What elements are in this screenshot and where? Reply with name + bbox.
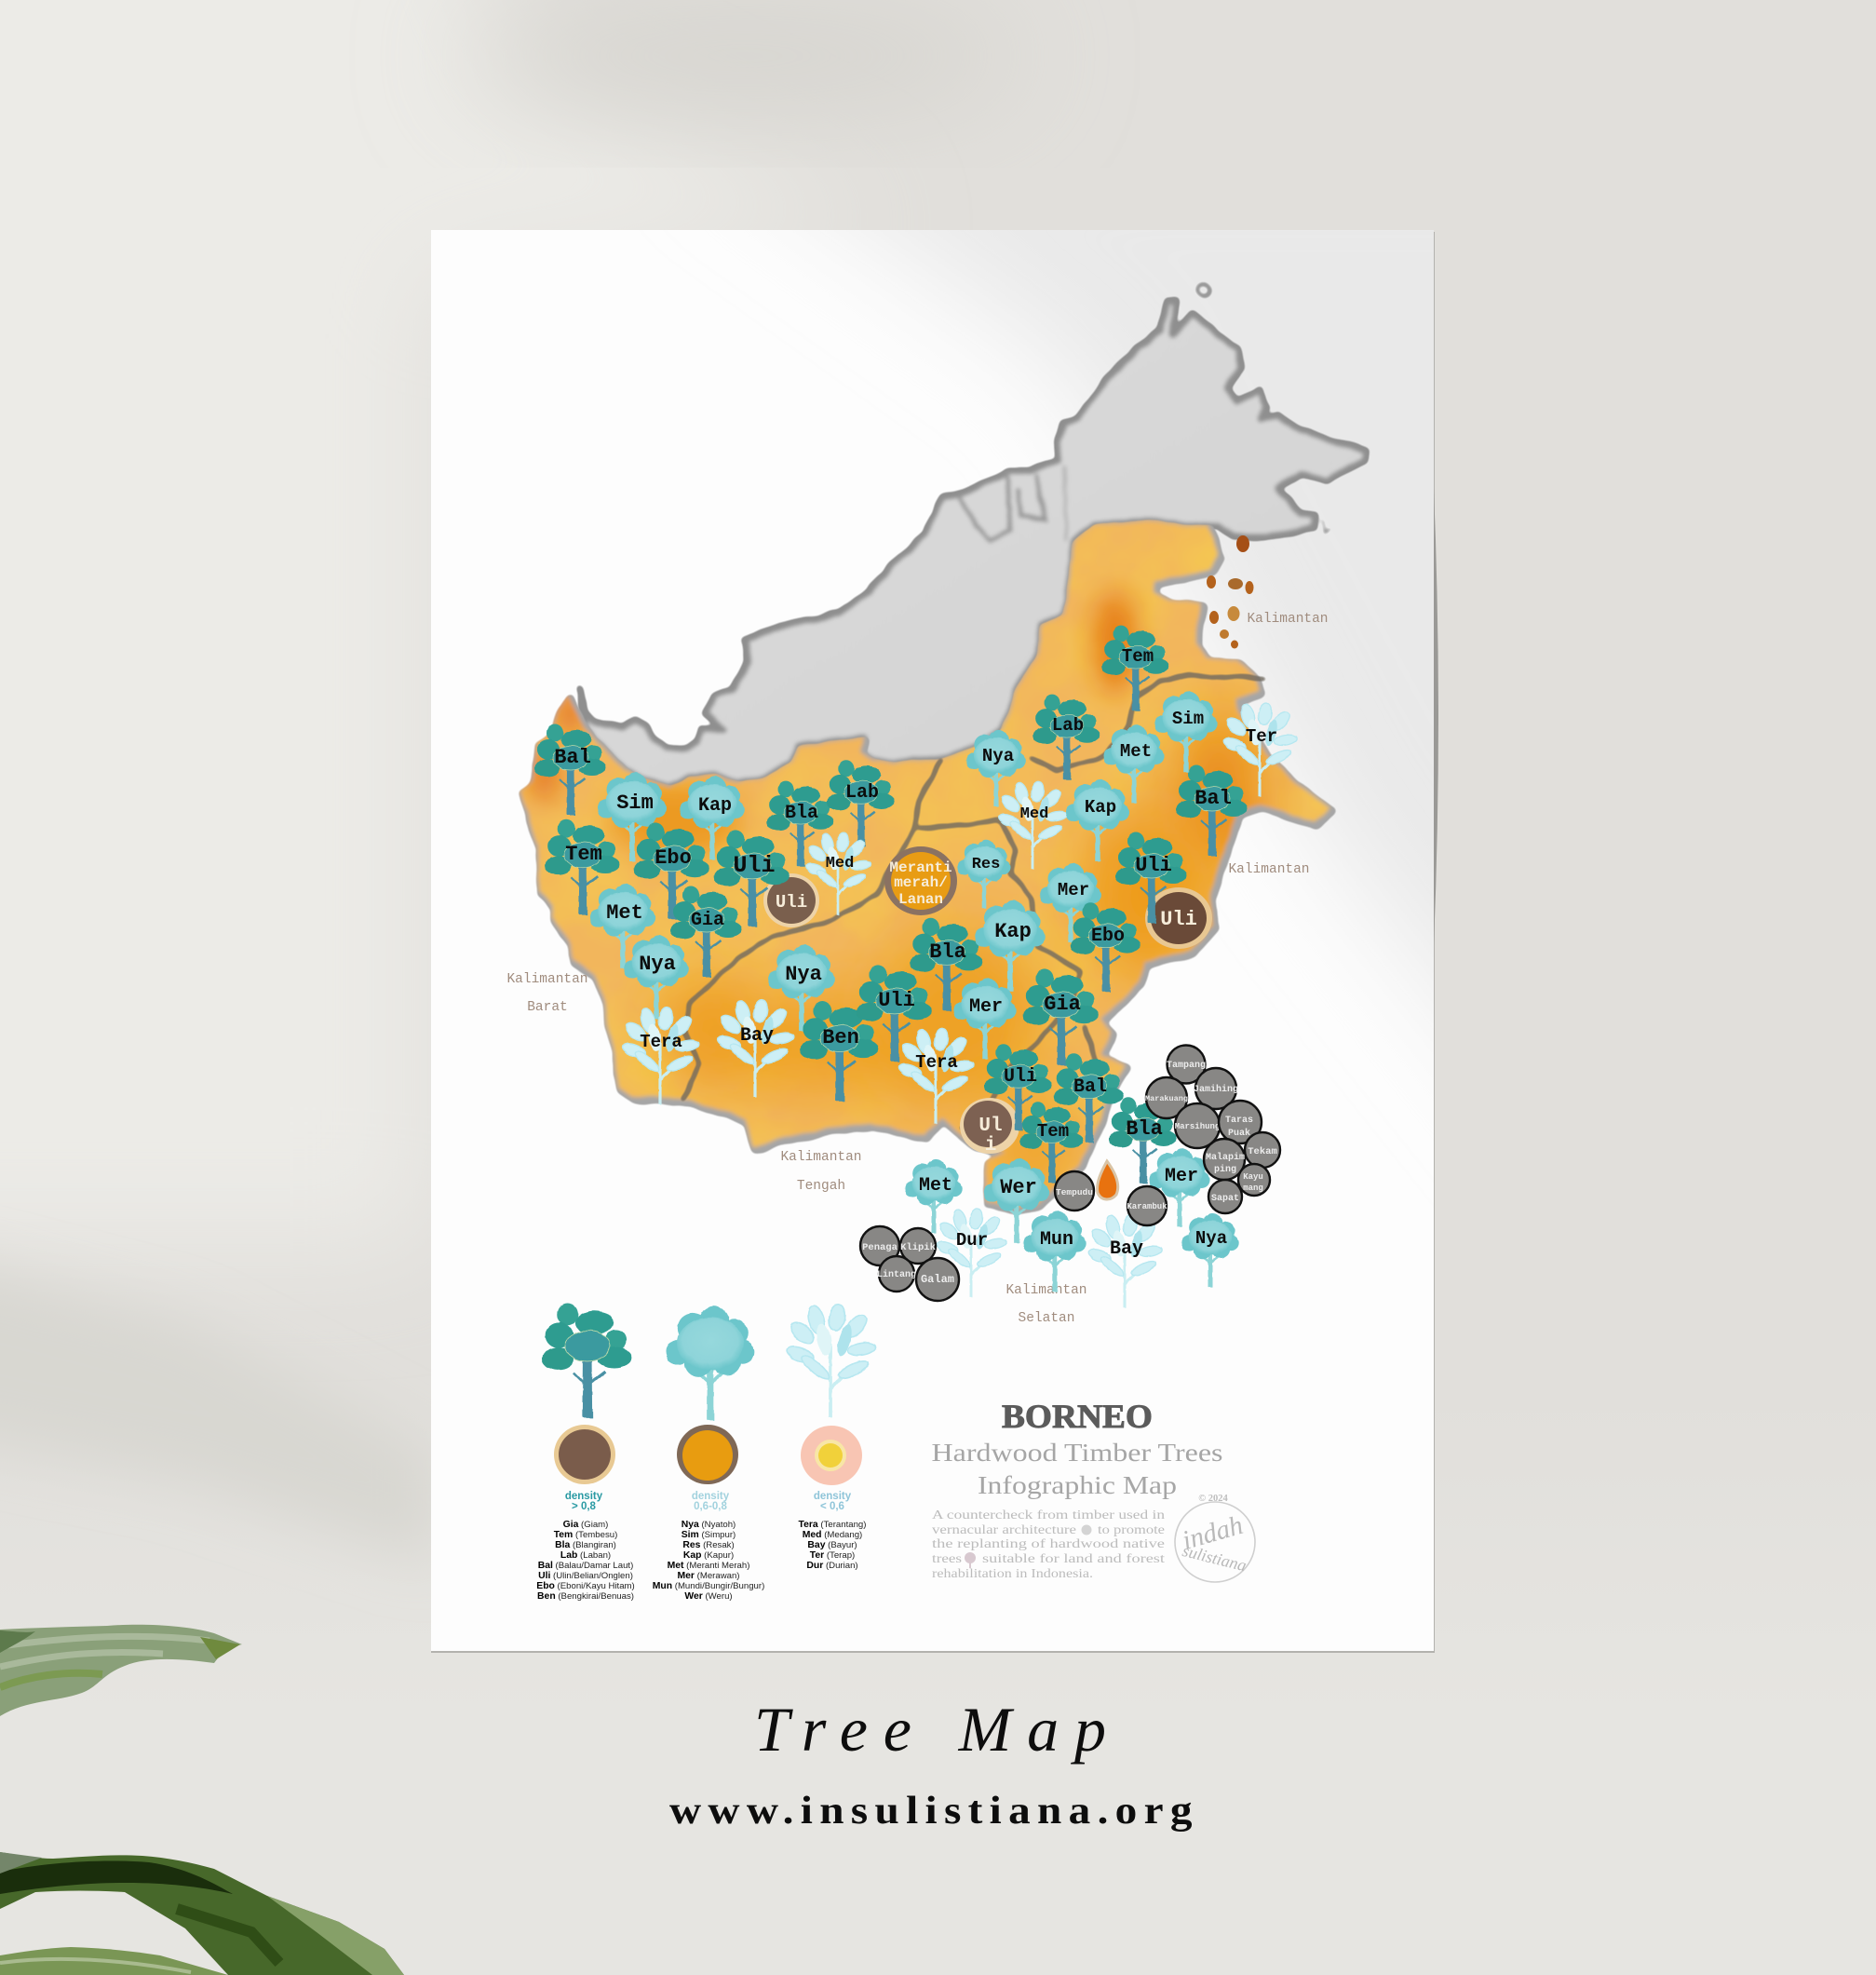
tree: Bla	[1109, 1097, 1177, 1184]
vernacular timber circles: east cluster	[1055, 1045, 1280, 1225]
tree: Nya: Nya	[785, 963, 822, 986]
description paragraph: rehabilitation in Indonesia.	[932, 1567, 1093, 1581]
copyright and signature stamp: sulistiana	[1181, 1541, 1248, 1575]
tree: Mer: Mer	[1058, 880, 1089, 900]
tree: Mer	[953, 978, 1017, 1059]
tree: Nya	[1181, 1213, 1239, 1287]
circle: Malapimping: Malapim	[1206, 1152, 1245, 1163]
tree: Kap	[1065, 779, 1129, 861]
legend density label: density	[814, 1491, 852, 1502]
species list low density: Med (Medang)	[803, 1530, 862, 1540]
tree: Bay: Bay	[1110, 1238, 1143, 1260]
tree: Ter	[1221, 702, 1298, 796]
tree: Tem	[546, 819, 620, 914]
circle: Tekam: Tekam	[1248, 1146, 1277, 1157]
tree: Ben: Ben	[822, 1026, 859, 1049]
tree: Tem: Tem	[565, 843, 602, 866]
tree: Gia: Gia	[1044, 993, 1081, 1016]
species list low density: Ter (Terap)	[810, 1550, 855, 1561]
trees on the map	[534, 626, 1298, 1307]
tree: Kap	[680, 776, 745, 859]
species list medium density: Nya (Nyatoh)	[682, 1520, 736, 1530]
tree: Lab	[1033, 695, 1100, 779]
circle: Tekam	[1245, 1132, 1280, 1168]
tree: Tem: Tem	[1122, 646, 1154, 667]
subtitle: Hardwood Timber Trees	[931, 1439, 1223, 1467]
region labels: Kalimantan	[1247, 612, 1329, 627]
legend wood disc medium	[677, 1425, 738, 1484]
copyright and signature stamp	[1175, 1494, 1255, 1582]
circle: Tampang	[1167, 1045, 1206, 1084]
circle: Marakuang: Marakuang	[1145, 1094, 1188, 1103]
tree: Kap: Kap	[994, 920, 1032, 943]
species list high density	[536, 1520, 635, 1602]
circle: Karambuk: Karambuk	[1127, 1202, 1167, 1211]
tree: Mer: Mer	[969, 996, 1003, 1018]
circle: Jamihing	[1194, 1068, 1238, 1109]
legend density label: density	[692, 1491, 730, 1502]
species list medium density: Kap (Kapur)	[683, 1550, 734, 1561]
tree: Mer: Mer	[1165, 1166, 1198, 1187]
circle: Malapimping	[1204, 1139, 1245, 1180]
subtitle	[931, 1439, 1223, 1499]
species list medium density: Mun (Mundi/Bungir/Bungur)	[653, 1581, 764, 1591]
legend density label: density	[565, 1491, 603, 1502]
tree: Bla	[767, 781, 834, 866]
circle: Klipik: Klipik	[900, 1242, 936, 1253]
region labels	[506, 612, 1329, 1326]
tree: Uli	[1115, 832, 1187, 923]
tree: Met	[905, 1159, 963, 1233]
tree: Tem: Tem	[1037, 1121, 1069, 1142]
species list high density: Gia (Giam)	[563, 1520, 608, 1530]
tree: Res: Res	[972, 856, 1000, 873]
map: small orange island	[1098, 1161, 1118, 1199]
tree: Nya	[768, 944, 835, 1031]
tree: Tem	[1020, 1102, 1084, 1183]
circle: Galam: Galam	[921, 1273, 954, 1286]
vernacular timber circles: south cluster	[860, 1226, 959, 1301]
legend density label: < 0,6	[820, 1501, 844, 1512]
caption: Tree Map: Tree Map	[754, 1694, 1106, 1765]
species list medium density	[653, 1520, 764, 1602]
tree: Mun	[1023, 1211, 1086, 1292]
circle: Kayu mang: Kayu	[1243, 1172, 1263, 1182]
wood disc: Uli south: i	[985, 1135, 996, 1157]
tree: Dur: Dur	[956, 1230, 988, 1251]
tree: Gia: Gia	[691, 910, 724, 931]
species list medium density: Res (Resak)	[682, 1540, 735, 1550]
caption: website: www.insulistiana.org	[669, 1788, 1199, 1832]
tree: Met: Met	[1120, 741, 1152, 762]
tree: Ebo	[634, 822, 709, 919]
tree: Dur	[936, 1208, 1007, 1297]
tree: Tera	[621, 1006, 700, 1104]
plant leaf: lower dark	[0, 1852, 404, 1975]
legend: density below 0.6	[785, 1303, 877, 1571]
tree: Bla: Bla	[929, 940, 966, 964]
tree: Uli	[857, 965, 932, 1062]
region labels: Barat	[527, 1000, 568, 1015]
tree: Bay: Bay	[740, 1025, 774, 1047]
legend tree light	[785, 1303, 877, 1417]
description paragraph: the replanting of hardwood native	[932, 1537, 1165, 1551]
map: Malaysia and Brunei in grey	[580, 284, 1367, 789]
wood disc: Uli east	[1145, 887, 1212, 949]
wood disc: Meranti merah / Lanan: merah/	[894, 874, 948, 891]
tree: Bay	[716, 998, 795, 1097]
region labels: Tengah	[797, 1179, 845, 1194]
description paragraph: A countercheck from timber used in	[932, 1508, 1165, 1522]
plant leaf: top	[0, 1625, 242, 1716]
tree: Ebo: Ebo	[655, 846, 692, 870]
legend density label: 0,6-0,8	[694, 1501, 728, 1512]
tree: Sim	[1154, 691, 1218, 772]
region labels: Kalimantan	[506, 972, 588, 987]
map: Kalimantan watercolour region	[503, 503, 1359, 1229]
description paragraph: to promote	[1098, 1523, 1165, 1537]
species list low density: Tera (Terantang)	[799, 1520, 866, 1530]
tree: Bal: Bal	[1073, 1076, 1107, 1098]
species list high density: Ebo (Eboni/Kayu Hitam)	[536, 1581, 635, 1591]
tree: Bay	[1086, 1213, 1163, 1307]
region labels: Kalimantan	[1005, 1283, 1087, 1298]
legend tree medium	[666, 1306, 754, 1420]
circle: Tempudu: Tempudu	[1056, 1187, 1093, 1197]
circle: Taras Puak: Puak	[1228, 1128, 1250, 1139]
circle: Marsihung: Marsihung	[1175, 1122, 1220, 1131]
tree: Bal	[1177, 765, 1248, 856]
tree: Kap	[975, 900, 1046, 991]
tree: Tera: Tera	[640, 1032, 682, 1052]
tree: Res	[957, 840, 1010, 908]
tree: Wer: Wer	[1000, 1176, 1037, 1199]
tree: Sim: Sim	[1172, 709, 1204, 729]
species list low density	[799, 1520, 866, 1571]
tree: Mun: Mun	[1040, 1229, 1073, 1251]
circle: Karambuk	[1127, 1186, 1167, 1225]
species list high density: Uli (Ulin/Belian/Onglen)	[538, 1571, 633, 1581]
tree: Gia	[670, 886, 742, 977]
tree: Uli: Uli	[1004, 1066, 1037, 1088]
tree: Wer	[983, 1158, 1049, 1243]
tree: Kap: Kap	[1085, 797, 1116, 818]
tree: Lab: Lab	[1052, 715, 1084, 736]
tree: Sim	[598, 773, 667, 861]
copyright and signature stamp: © 2024	[1198, 1494, 1228, 1504]
tree: Nya	[624, 935, 689, 1019]
species list medium density: Mer (Merawan)	[678, 1571, 739, 1581]
copyright and signature stamp: indah	[1179, 1510, 1247, 1556]
plant leaf: bottom	[0, 1947, 228, 1975]
tree: Uli: Uli	[878, 989, 915, 1012]
circle: Penaga: Penaga	[862, 1242, 898, 1253]
species list medium density: Wer (Weru)	[684, 1591, 733, 1602]
tree: Mer	[1040, 863, 1101, 942]
legend density label	[814, 1491, 852, 1512]
icon: grey circle	[1082, 1525, 1091, 1535]
map: province borders	[684, 675, 1263, 1128]
map: north-east islands	[1207, 535, 1253, 648]
tree: Tera	[898, 1027, 975, 1124]
legend density label: > 0,8	[572, 1501, 597, 1512]
tree: Ben	[801, 1001, 879, 1101]
subtitle: Infographic Map	[978, 1471, 1177, 1499]
wood disc: Uli south: Ul	[978, 1116, 1003, 1137]
circle: Tampang: Tampang	[1167, 1061, 1206, 1071]
tree: Bla	[911, 918, 983, 1010]
legend wood disc light	[801, 1426, 862, 1485]
circle: Taras Puak	[1219, 1101, 1262, 1143]
tree: Bal	[534, 724, 606, 815]
tree: Sim: Sim	[616, 791, 654, 815]
map of Borneo	[503, 284, 1367, 1229]
region labels: Kalimantan	[1228, 862, 1310, 877]
tree: Met: Met	[606, 901, 643, 925]
circle: Malapimping: ping	[1214, 1164, 1236, 1175]
circle: Marakuang	[1145, 1077, 1188, 1118]
region labels: Kalimantan	[780, 1150, 862, 1165]
species list medium density: Met (Meranti Merah)	[668, 1561, 749, 1571]
tree: Uli	[714, 830, 790, 927]
tree: Bal: Bal	[554, 746, 591, 769]
circle: Sapat	[1208, 1180, 1242, 1213]
legend: density above 0.8	[536, 1304, 635, 1602]
species list low density: Bay (Bayur)	[807, 1540, 857, 1550]
circle: Kayu mang: mang	[1243, 1184, 1263, 1193]
tree: Ebo	[1071, 902, 1140, 992]
species list low density: Dur (Durian)	[806, 1561, 858, 1571]
tree: Med	[804, 832, 871, 915]
tree: Uli: Uli	[1135, 854, 1172, 877]
tree: Med: Med	[826, 855, 854, 873]
description paragraph: vernacular architecture	[932, 1523, 1076, 1537]
tree: Gia	[1023, 968, 1099, 1065]
circle: Tempudu	[1055, 1171, 1094, 1211]
species list high density: Bla (Blangiran)	[555, 1540, 616, 1550]
tree: Uli: Uli	[733, 852, 776, 879]
legend density label	[692, 1491, 730, 1512]
species list medium density: Sim (Simpur)	[682, 1530, 736, 1540]
tree: Kap: Kap	[698, 795, 732, 817]
tree: Met: Met	[919, 1175, 952, 1197]
species list high density: Lab (Laban)	[560, 1550, 611, 1561]
tree: Med	[997, 780, 1068, 869]
title: BORNEO: BORNEO	[1002, 1398, 1153, 1435]
tree: Lab: Lab	[845, 782, 879, 804]
description paragraph	[932, 1508, 1165, 1581]
species list high density: Tem (Tembesu)	[554, 1530, 617, 1540]
tree: Med: Med	[1020, 805, 1048, 823]
tree: Tera: Tera	[915, 1052, 958, 1073]
species list high density: Ben (Bengkirai/Benuas)	[537, 1591, 634, 1602]
poster paper	[431, 230, 1438, 1653]
wood disc: Meranti merah / Lanan	[884, 846, 957, 915]
tree: Met	[1103, 724, 1165, 803]
tree: Met	[589, 884, 655, 968]
icon: pale tree	[965, 1552, 976, 1568]
wood disc: Uli west: Uli	[776, 892, 807, 913]
tree: Lab	[827, 760, 895, 846]
tree: Nya: Nya	[1195, 1228, 1227, 1249]
tree: Nya	[966, 730, 1026, 806]
tree: Bal	[1054, 1053, 1124, 1143]
circle: Taras Puak: Taras	[1225, 1116, 1253, 1126]
legend density label	[565, 1491, 603, 1512]
wood disc: Uli east: Uli	[1160, 908, 1197, 931]
wood disc: Uli west	[763, 873, 819, 927]
tree: Tem	[1102, 626, 1169, 710]
legend wood disc dark	[554, 1425, 615, 1484]
tree: Uli	[984, 1044, 1052, 1130]
circle: Kayu mang	[1238, 1164, 1270, 1196]
description paragraph: trees	[932, 1552, 962, 1566]
tree: Ebo: Ebo	[1091, 926, 1125, 947]
wood disc: Meranti merah / Lanan: Lanan	[898, 891, 943, 908]
legend tree dark	[542, 1304, 632, 1417]
wood disc: Meranti merah / Lanan: Meranti	[889, 859, 952, 876]
species list high density: Bal (Balau/Damar Laut)	[538, 1561, 633, 1571]
tree: Nya: Nya	[639, 953, 676, 976]
circle: Lintang: Lintang	[877, 1269, 916, 1280]
region labels: Selatan	[1019, 1311, 1074, 1326]
circle: Sapat: Sapat	[1211, 1194, 1239, 1204]
tree: Nya: Nya	[982, 746, 1014, 766]
tree: Bal: Bal	[1194, 787, 1232, 810]
circle: Marsihung	[1175, 1103, 1220, 1148]
legend: density 0.6 to 0.8	[653, 1306, 764, 1602]
tree: Ter: Ter	[1246, 726, 1277, 747]
description paragraph: suitable for land and forest	[982, 1552, 1165, 1566]
circle: Jamihing: Jamihing	[1194, 1084, 1238, 1095]
tree: Mer	[1149, 1148, 1210, 1226]
wood disc: Uli south	[960, 1098, 1019, 1157]
tree: Bla: Bla	[1126, 1117, 1163, 1141]
tree: Bla: Bla	[785, 803, 818, 824]
